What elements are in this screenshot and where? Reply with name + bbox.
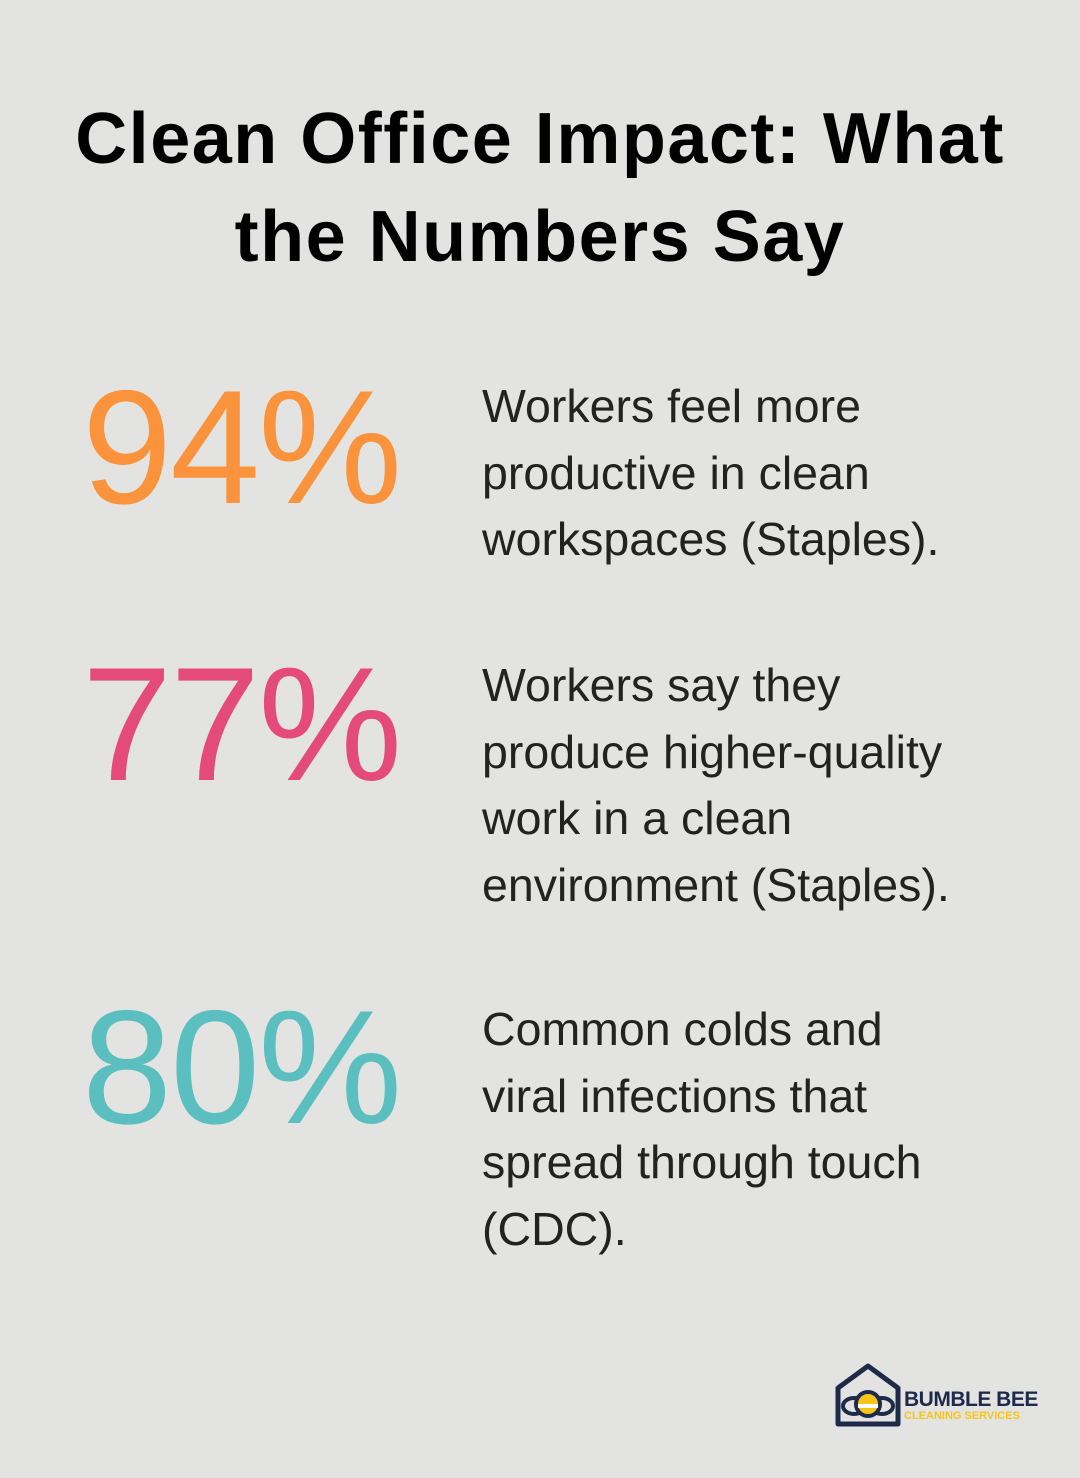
text 80%: Common colds and [482,1003,883,1055]
title: Clean Office Impact: What [75,99,1005,179]
text 77% [482,659,950,910]
title [75,99,1005,277]
text 77%: environment (Staples). [482,858,950,910]
text 94% [482,380,939,565]
text 77%: Workers say they [482,659,840,711]
text 80%: viral infections that [482,1070,867,1122]
logo text: BUMBLE BEE [904,1388,1038,1411]
stat 77%: 77% [82,634,400,815]
text 94%: workspaces (Staples). [482,513,939,565]
text 77%: work in a clean [482,792,792,844]
text 77%: produce higher-quality [482,726,942,778]
text 94%: Workers feel more [482,380,861,432]
text 80%: spread through touch [482,1136,921,1188]
title: the Numbers Say [235,197,845,277]
logo text [904,1388,1038,1422]
icon: bee house [836,1364,900,1426]
text 80%: (CDC). [482,1202,627,1254]
text 94%: productive in clean [482,446,870,498]
logo text: CLEANING SERVICES [904,1410,1020,1422]
logo [836,1364,1038,1426]
stat 94%: 94% [82,357,400,538]
text 80% [482,1003,921,1254]
stat 80%: 80% [82,977,400,1158]
